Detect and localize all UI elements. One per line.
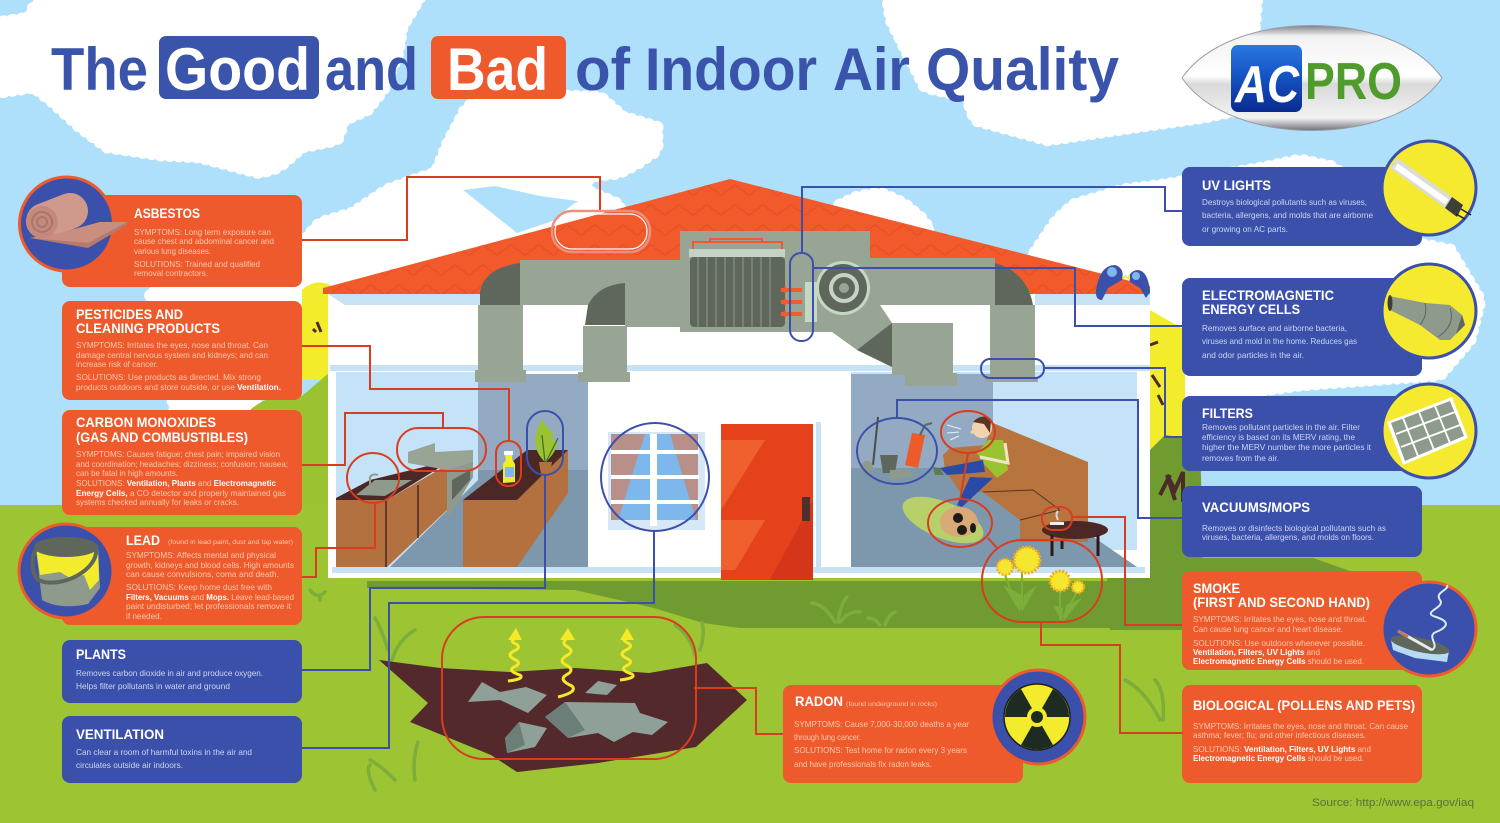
- eave shadow: [328, 294, 1150, 305]
- connector lines: [302, 177, 1182, 748]
- panel: radon: through lung cancer.: [794, 732, 861, 742]
- panel: carbon monoxides: Energy Cells, a CO detector and properly maintained gas: [76, 488, 286, 498]
- panel: pesticides: products outdoors and store outside, or use Ventilation.: [76, 382, 281, 392]
- radon soil: [379, 628, 747, 772]
- panel: plants: Removes carbon dioxide in air and produce oxygen.: [76, 668, 263, 678]
- plant: [535, 420, 558, 474]
- source: Source: http://www.epa.gov/iaq: [1312, 797, 1474, 809]
- coil: [689, 239, 785, 327]
- panel: lead: [19, 524, 302, 625]
- panel: smoke: SYMPTOMS: Irritates the eyes, nose and throat.: [1193, 614, 1367, 624]
- icon: paint bucket: [19, 524, 113, 618]
- icon: energy cell: [1382, 264, 1476, 358]
- duct drops: [475, 305, 1038, 386]
- panel: plants: [62, 640, 302, 703]
- bush: [1105, 435, 1205, 630]
- panel: biological: Electromagnetic Energy Cells should be used.: [1193, 753, 1364, 763]
- radon arrows: [508, 638, 633, 697]
- panel: pesticides: CLEANING PRODUCTS: [76, 320, 220, 336]
- panel: smoke: [1182, 571, 1476, 676]
- panel: filters: [1182, 384, 1476, 478]
- panel: lead: LEAD: [126, 532, 160, 548]
- panel: biological: SYMPTOMS: Irritates the eyes, nose and throat. Can cause: [1193, 721, 1408, 731]
- title: Bad: [447, 36, 548, 103]
- panel: electromagnetic energy cells: ELECTROMAGNETIC: [1202, 287, 1334, 303]
- icon: insulation roll: [20, 177, 127, 271]
- panel: asbestos: SOLUTIONS: Trained and qualified: [134, 259, 260, 269]
- title: and: [325, 36, 418, 103]
- title: The: [51, 36, 148, 103]
- vacuum mop bucket: [861, 417, 932, 480]
- panel: asbestos: ASBESTOS: [134, 205, 200, 221]
- panel: asbestos: [20, 177, 302, 287]
- ground: [0, 505, 1500, 823]
- panel: radon: [783, 670, 1085, 783]
- panel: lead: SYMPTOMS: Affects mental and physical: [126, 550, 276, 560]
- birds: [1096, 265, 1150, 300]
- panel: electromagnetic energy cells: viruses and mold in the home. Reduces gas: [1202, 336, 1357, 346]
- panel: carbon monoxides: (GAS AND COMBUSTIBLES): [76, 429, 248, 445]
- grass tufts: [310, 590, 1163, 790]
- panel: filters: FILTERS: [1202, 405, 1253, 421]
- kitchen counter: [336, 463, 447, 567]
- panel: vacuums and mops: [1182, 486, 1422, 557]
- sky wedge between clouds: [463, 186, 600, 233]
- panel: asbestos: SYMPTOMS: Long term exposure can: [134, 227, 271, 237]
- panel: electromagnetic energy cells: ENERGY CELLS: [1202, 301, 1300, 317]
- panel: plants: PLANTS: [76, 646, 126, 662]
- panel: plants: Helps filter pollutants in water and ground: [76, 681, 230, 691]
- trim strips: [330, 365, 1150, 573]
- panel: carbon monoxides: SYMPTOMS: Causes fatigue; chest pain; impaired vision: [76, 449, 280, 459]
- panel: uv lights: bacteria, allergens, and molds that are airborne: [1202, 210, 1373, 220]
- blower fan: [805, 261, 870, 322]
- house shadow ground: [367, 558, 1353, 628]
- panel: filters: efficiency is based on its MERV rating, the: [1202, 432, 1355, 442]
- panel: lead: SOLUTIONS: Keep home dust free with: [126, 582, 272, 592]
- panel: ventilation: circulates outside air indoors.: [76, 760, 183, 770]
- panel: filters: Removes pollutant particles in the air. Filter: [1202, 422, 1360, 432]
- left room: [336, 372, 588, 567]
- panel: carbon monoxides: SOLUTIONS: Ventilation, Plants and Electromagnetic: [76, 478, 276, 488]
- panel: smoke: Ventilation, Filters, UV Lights and: [1193, 647, 1320, 657]
- title: [51, 36, 1120, 103]
- panel: carbon monoxides: and coordination; headaches; dizziness; confusion; nausea;: [76, 459, 288, 469]
- panel: radon: SOLUTIONS: Test home for radon every 3 years: [794, 745, 967, 755]
- clouds: [0, 0, 1480, 410]
- panel: uv lights: Destroys biological pollutants such as viruses,: [1202, 197, 1367, 207]
- panel: uv lights: [1182, 141, 1476, 246]
- panel: lead: Filters, Vacuums and Mops. Leave lead-based: [126, 592, 294, 602]
- panel: uv lights: UV LIGHTS: [1202, 177, 1271, 193]
- panel: lead: paint undisturbed; let professionals remove it: [126, 601, 292, 611]
- AC ductwork: [475, 231, 1038, 386]
- panel: smoke: SMOKE: [1193, 580, 1240, 596]
- panel: electromagnetic energy cells: [1182, 264, 1476, 376]
- small cloud on roof line: [558, 197, 622, 218]
- title: Air: [833, 36, 910, 103]
- panel: electromagnetic energy cells: Removes surface and airborne bacteria,: [1202, 323, 1347, 333]
- panel: vacuums and mops: Removes or disinfects biological pollutants such as: [1202, 523, 1386, 533]
- roof: [323, 179, 1150, 294]
- logo: [1182, 26, 1442, 130]
- logo: AC: [1233, 56, 1300, 114]
- panel: pesticides: SYMPTOMS: Irritates the eyes, nose and throat. Can: [76, 340, 268, 350]
- panel: vacuums and mops: VACUUMS/MOPS: [1202, 499, 1310, 515]
- panel: biological: BIOLOGICAL (POLLENS AND PETS): [1193, 697, 1415, 713]
- right room: [851, 372, 1137, 567]
- panel: pesticides: increase risk of cancer.: [76, 359, 158, 369]
- panel: lead: if needed.: [126, 611, 162, 621]
- icon: uv lamp: [1382, 141, 1476, 235]
- dandelions: [997, 547, 1084, 622]
- icon: air filter: [1382, 384, 1476, 478]
- panel: asbestos: cause chest and abdominal cancer and: [134, 236, 274, 246]
- panel: vacuums and mops: viruses, bacteria, allergens, and molds on floors.: [1202, 532, 1374, 542]
- callout rings: [347, 211, 1102, 759]
- stove: [408, 443, 473, 515]
- icon: ashtray with smoke: [1382, 582, 1476, 676]
- title: Good: [165, 36, 310, 103]
- panel: carbon monoxides: [62, 410, 302, 515]
- panel: pesticides: [62, 301, 302, 400]
- living room sofa: [943, 423, 1088, 542]
- panel: lead: (found in lead paint, dust and tap water): [168, 540, 293, 546]
- panel: pesticides: PESTICIDES AND: [76, 306, 183, 322]
- panel: pesticides: damage central nervous system and kidneys; and can: [76, 350, 268, 360]
- panel: carbon monoxides: can be fatal in high amounts.: [76, 468, 178, 478]
- panel: smoke: SOLUTIONS: Use outdoors whenever possible.: [1193, 638, 1365, 648]
- icon: radiation symbol: [991, 670, 1085, 764]
- trees behind house: [185, 282, 1185, 510]
- duct elbows: [480, 263, 1033, 367]
- panel: radon: (found underground in rocks): [846, 701, 937, 708]
- cleaning bottle: [503, 451, 515, 483]
- panel: pesticides: SOLUTIONS: Use products as directed. Mix strong: [76, 372, 261, 382]
- panel: radon: and have professionals fix radon leaks.: [794, 759, 932, 769]
- door: [721, 424, 813, 580]
- panel: ventilation: Can clear a room of harmful toxins in the air and: [76, 747, 252, 757]
- panel: asbestos: various lung diseases.: [134, 246, 211, 256]
- panel: ventilation: VENTILATION: [76, 726, 164, 742]
- sneezing man: [933, 417, 1008, 507]
- panel: filters: higher the MERV number the more particles it: [1202, 442, 1372, 452]
- house: [323, 179, 1150, 622]
- panel: carbon monoxides: CARBON MONOXIDES: [76, 414, 216, 430]
- panel: smoke: Electromagnetic Energy Cells should be used.: [1193, 656, 1364, 666]
- panel: smoke: Can cause lung cancer and heart disease.: [1193, 624, 1343, 634]
- panel: asbestos: removal contractors.: [134, 268, 208, 278]
- logo: PRO: [1305, 53, 1402, 111]
- panel: smoke: (FIRST AND SECOND HAND): [1193, 594, 1370, 610]
- panel: lead: can cause convulsions, coma and death.: [126, 569, 279, 579]
- house wall: [328, 290, 1150, 578]
- rocks: [468, 681, 668, 753]
- coffee table and ashtray: [1042, 511, 1108, 556]
- rug and pet: [896, 487, 990, 553]
- panel: biological: SOLUTIONS: Ventilation, Filters, UV Lights and: [1193, 744, 1371, 754]
- refrigerant arrows: [781, 290, 802, 314]
- title: Indoor: [645, 36, 817, 103]
- panel: carbon monoxides: systems checked annually for leaks or cracks.: [76, 497, 239, 507]
- panel: radon: SYMPTOMS: Cause 7,000-30,000 deaths a year: [794, 719, 969, 729]
- panel: ventilation: [62, 716, 302, 783]
- title: Quality: [926, 36, 1120, 103]
- panel: biological: [1182, 685, 1422, 783]
- panel: electromagnetic energy cells: and odor particles in the air.: [1202, 350, 1304, 360]
- panel: uv lights: or growing on AC parts.: [1202, 224, 1288, 234]
- panel: radon: RADON: [795, 693, 843, 709]
- title: of: [575, 36, 631, 103]
- panel: lead: growth, kidneys and blood cells. High amounts: [126, 560, 294, 570]
- panel: filters: removes from the air.: [1202, 453, 1279, 463]
- window: [608, 432, 705, 530]
- kitchen island: [463, 450, 568, 567]
- panel: biological: asthma; fever; flu; and other infectious diseases.: [1193, 730, 1366, 740]
